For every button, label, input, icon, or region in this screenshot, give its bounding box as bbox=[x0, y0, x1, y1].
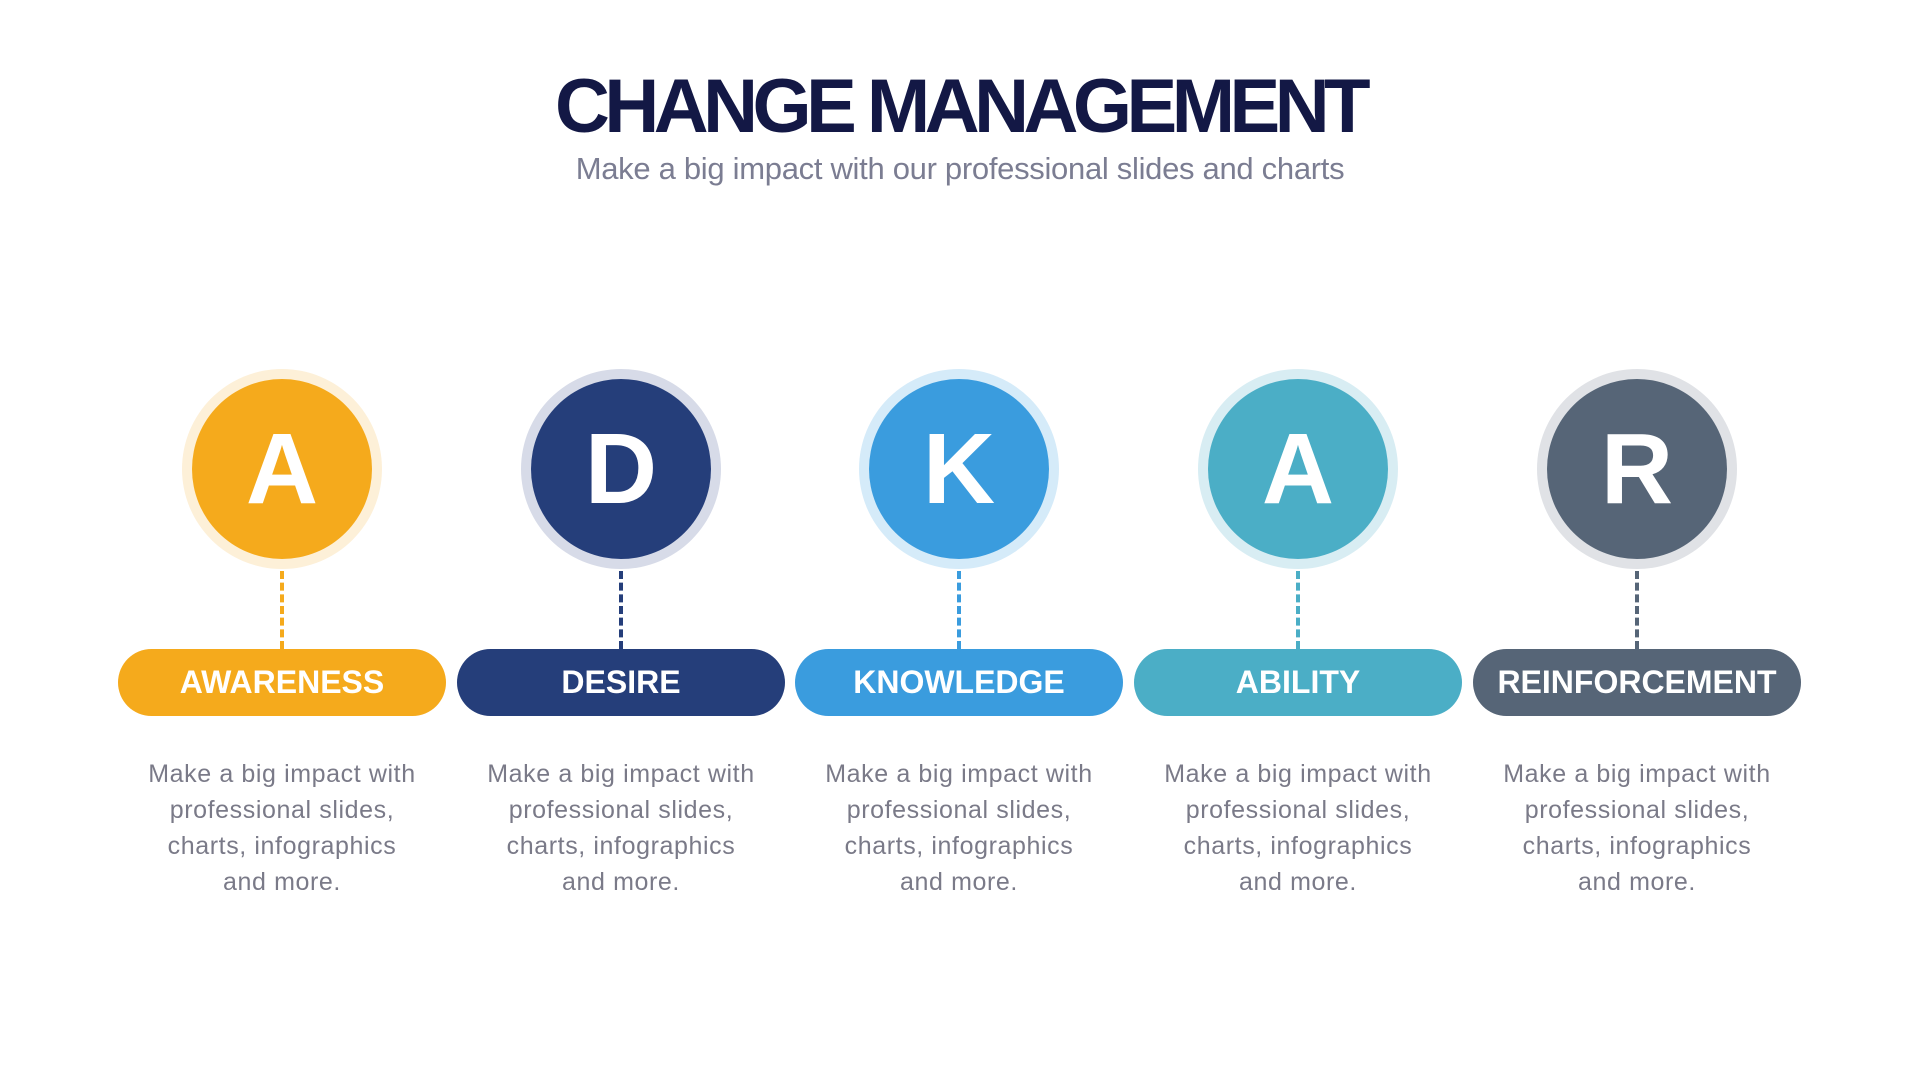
icon: circle D: D bbox=[585, 413, 657, 525]
label: reinforcement: REINFORCEMENT bbox=[1497, 664, 1777, 700]
icon: circle R bbox=[1537, 369, 1737, 569]
text: awareness: professional slides, bbox=[170, 796, 394, 824]
label: awareness: AWARENESS bbox=[180, 664, 384, 700]
text: reinforcement: charts, infographics bbox=[1523, 832, 1751, 860]
text: desire: professional slides, bbox=[509, 796, 733, 824]
icon: circle R: R bbox=[1601, 413, 1673, 525]
text: knowledge bbox=[825, 760, 1093, 896]
panel: ability bbox=[1134, 369, 1462, 896]
label: knowledge: KNOWLEDGE bbox=[853, 664, 1065, 700]
text: ability: and more. bbox=[1239, 868, 1357, 896]
text: awareness: and more. bbox=[223, 868, 341, 896]
icon: circle D bbox=[521, 369, 721, 569]
connector bbox=[619, 571, 623, 649]
label: reinforcement bbox=[1473, 649, 1801, 716]
icon: circle A: A bbox=[246, 413, 318, 525]
text: awareness: charts, infographics bbox=[168, 832, 396, 860]
subtitle: Make a big impact with our professional slides and charts bbox=[576, 151, 1344, 186]
text: reinforcement bbox=[1503, 760, 1771, 896]
text: reinforcement: and more. bbox=[1578, 868, 1696, 896]
icon: circle A bbox=[182, 369, 382, 569]
label: desire: DESIRE bbox=[561, 664, 681, 700]
text: desire bbox=[487, 760, 755, 896]
icon: circle K: K bbox=[923, 413, 995, 525]
text: awareness bbox=[148, 760, 416, 896]
text: reinforcement: professional slides, bbox=[1525, 796, 1749, 824]
connector bbox=[957, 571, 961, 649]
text: knowledge: charts, infographics bbox=[845, 832, 1073, 860]
text: ability: charts, infographics bbox=[1184, 832, 1412, 860]
text: knowledge: Make a big impact with bbox=[825, 760, 1093, 788]
label: ability bbox=[1134, 649, 1462, 716]
icon: circle A: A bbox=[1262, 413, 1334, 525]
icon: circle A bbox=[1198, 369, 1398, 569]
text: ability: professional slides, bbox=[1186, 796, 1410, 824]
text: awareness: Make a big impact with bbox=[148, 760, 416, 788]
icon: circle K bbox=[859, 369, 1059, 569]
text: desire: charts, infographics bbox=[507, 832, 735, 860]
text: reinforcement: Make a big impact with bbox=[1503, 760, 1771, 788]
text: desire: and more. bbox=[562, 868, 680, 896]
text: desire: Make a big impact with bbox=[487, 760, 755, 788]
title: CHANGE MANAGEMENT bbox=[555, 64, 1365, 149]
connector bbox=[280, 571, 284, 649]
panel: awareness bbox=[118, 369, 446, 896]
panel: reinforcement bbox=[1473, 369, 1801, 896]
panel: desire bbox=[457, 369, 785, 896]
text: ability: Make a big impact with bbox=[1164, 760, 1432, 788]
label: desire bbox=[457, 649, 785, 716]
text: ability bbox=[1164, 760, 1432, 896]
text: knowledge: and more. bbox=[900, 868, 1018, 896]
text: knowledge: professional slides, bbox=[847, 796, 1071, 824]
panel: knowledge bbox=[795, 369, 1123, 896]
label: ability: ABILITY bbox=[1236, 664, 1360, 700]
connector bbox=[1635, 571, 1639, 649]
connector bbox=[1296, 571, 1300, 649]
label: knowledge bbox=[795, 649, 1123, 716]
label: awareness bbox=[118, 649, 446, 716]
